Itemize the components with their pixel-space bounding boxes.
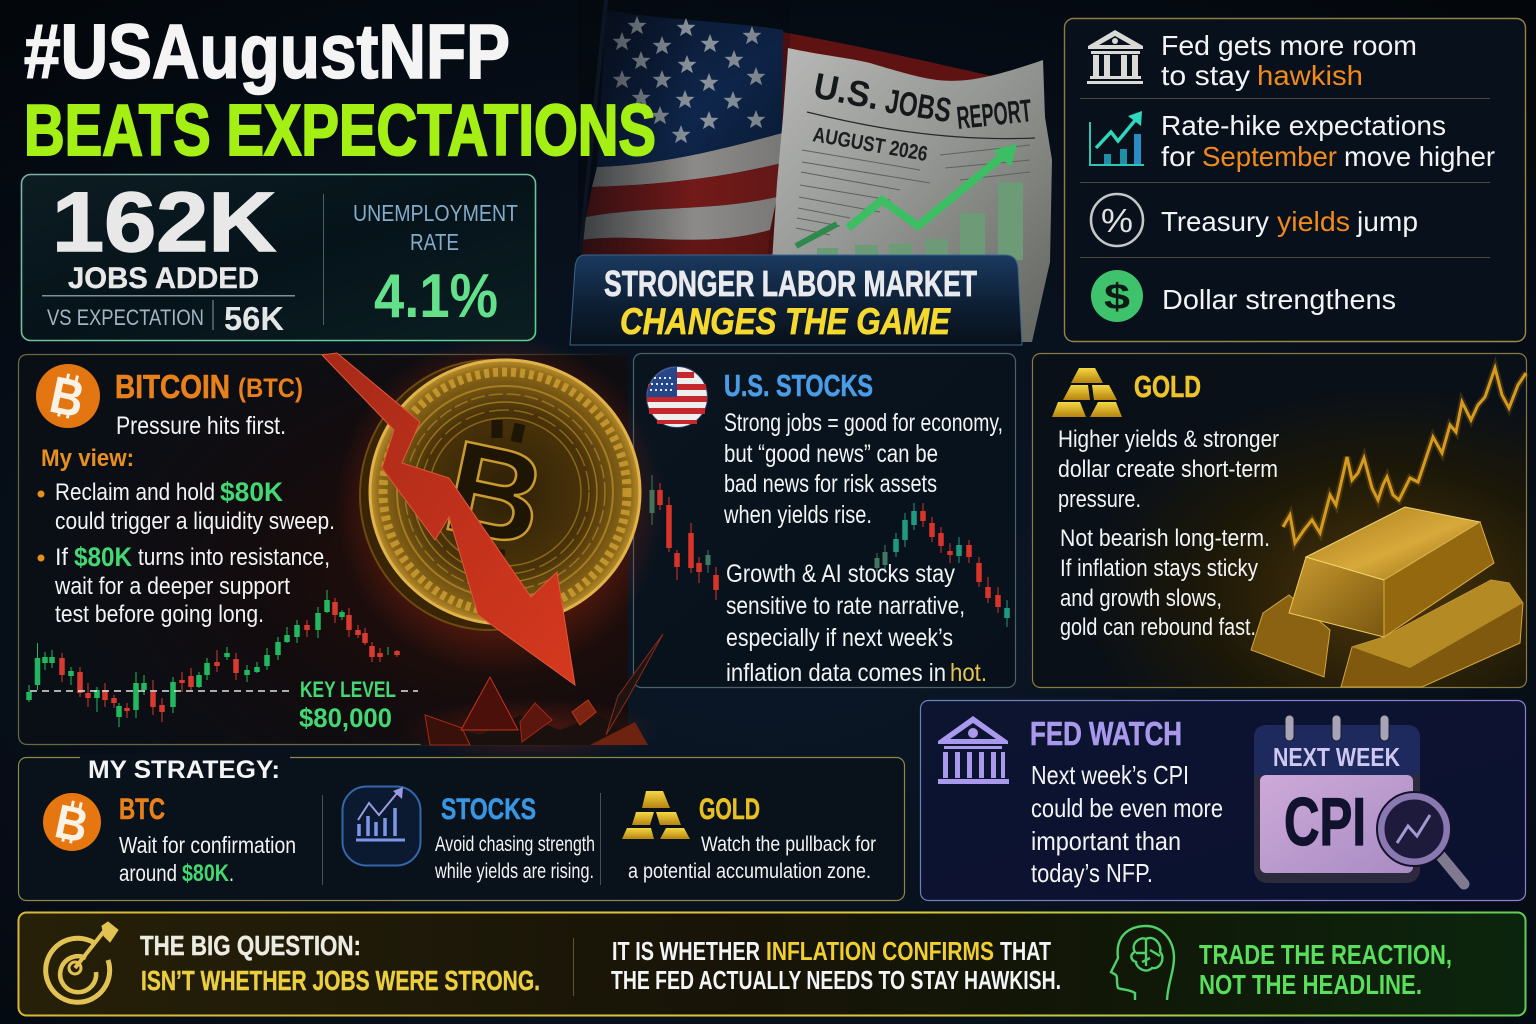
text: trade the reaction: NOT THE HEADLINE. — [1199, 969, 1422, 1000]
strategy: BTC text — [119, 793, 296, 887]
illustration: jobs report newspaper: AUGUST 2026 — [811, 123, 929, 166]
stat: unemployment rate: UNEMPLOYMENT — [353, 200, 518, 226]
panel: key jobs numbers — [22, 174, 536, 340]
text: stocks first paragraph: bad news for risk assets — [724, 470, 937, 498]
text: bullet reclaim — [38, 477, 335, 535]
illustration: jobs report newspaper: JOBS — [883, 82, 954, 130]
stat: expectation 56K: 56K — [224, 300, 284, 337]
icon: percent: % — [1101, 202, 1133, 239]
text: treasury yields: yields — [1277, 206, 1350, 237]
text: the big question: THE BIG QUESTION: — [140, 930, 361, 961]
text: stocks second paragraph: hot. — [950, 659, 987, 687]
panel: fed watch — [920, 700, 1526, 900]
panel: bitcoin — [18, 335, 665, 762]
strategy: stocks text: Avoid chasing strength — [435, 833, 595, 856]
text: gold second paragraph: gold can rebound fast. — [1060, 614, 1256, 641]
text: rate hike: move higher — [1344, 141, 1495, 172]
stat: unemployment rate — [353, 200, 518, 331]
strategy: BTC text: around — [119, 860, 177, 886]
text: rate hike — [1161, 110, 1495, 172]
text: the big question — [140, 930, 540, 996]
text: stocks first paragraph — [723, 409, 1003, 529]
text: bullet resistance: test before going long. — [55, 601, 264, 628]
text: stocks second paragraph — [726, 560, 987, 687]
text: bullet reclaim: Reclaim and hold — [55, 479, 215, 506]
icon: target with arrow — [46, 922, 118, 1002]
illustration: glow and rubble — [335, 335, 665, 762]
stat: expectation 56K: VS EXPECTATION — [47, 305, 204, 330]
text: bullet reclaim: could trigger a liquidity sweep. — [55, 508, 335, 535]
text: bullet reclaim: $80K — [220, 477, 283, 507]
icon: dollar — [1091, 270, 1143, 322]
text: bullet resistance — [38, 542, 330, 628]
text: trade the reaction — [1199, 939, 1452, 1000]
text: gold first paragraph: pressure. — [1058, 486, 1141, 513]
text: fed watch body — [1031, 760, 1223, 888]
text: trade the reaction: TRADE THE REACTION, — [1199, 939, 1452, 970]
text: bullet resistance: $80K — [74, 542, 132, 572]
key level line and label — [30, 677, 418, 733]
text: bullet resistance: wait for a deeper support — [54, 573, 290, 600]
illustration: gold bars — [1251, 507, 1523, 687]
heading: my strategy: MY STRATEGY: — [88, 756, 280, 784]
strategy: gold text: a potential accumulation zone. — [628, 860, 871, 883]
text: the big question: ISN’T WHETHER JOBS WERE STRONG. — [141, 965, 540, 996]
banner: stronger labor market: STRONGER LABOR MARKET — [604, 263, 977, 304]
illustration: jobs report newspaper: REPORT — [955, 92, 1034, 136]
band: the big question — [18, 912, 1526, 1016]
icon: bitcoin: B — [50, 795, 93, 854]
banner: stronger labor market — [570, 255, 1022, 345]
stat: unemployment rate: RATE — [410, 229, 459, 255]
illustration: bitcoin coin: B — [433, 412, 557, 574]
text: rate hike: Rate-hike expectations — [1161, 110, 1446, 141]
strategy: gold text: GOLD — [699, 793, 760, 826]
text: inflation statement: THE FED ACTUALLY NEEDS TO STAY HAWKISH. — [611, 965, 1061, 995]
text: gold second paragraph — [1060, 525, 1270, 641]
icon: rising chart — [1090, 111, 1144, 165]
illustration: American flag — [578, 0, 1000, 260]
stat: expectation 56K — [47, 300, 284, 337]
text: treasury yields — [1161, 206, 1418, 237]
text: gold second paragraph: Not bearish long-term. — [1060, 525, 1270, 552]
text: inflation statement: INFLATION CONFIRMS — [766, 936, 994, 966]
heading: U.S. stocks: U.S. STOCKS — [724, 368, 873, 403]
heading: bitcoin: BITCOIN — [115, 368, 230, 405]
strategy: BTC text: Wait for confirmation — [119, 832, 296, 858]
icon: bitcoin circle: B — [45, 366, 89, 430]
icon: dollar: $ — [1104, 276, 1130, 317]
text: gold first paragraph: dollar create short-term — [1058, 456, 1278, 483]
heading: fed watch: FED WATCH — [1030, 715, 1182, 752]
text: fed watch body: important than — [1031, 826, 1181, 856]
chart: bitcoin candlesticks — [29, 590, 397, 727]
text: fed watch body: today’s NFP. — [1031, 858, 1153, 888]
chart: stocks candlesticks — [652, 475, 1007, 627]
text: pressure hits first: Pressure hits first. — [116, 412, 286, 440]
text: stocks second paragraph: especially if next week’s — [726, 624, 953, 652]
panel: my strategy — [18, 754, 904, 900]
strategy: stocks text: STOCKS — [441, 793, 536, 826]
icon: bank — [1087, 30, 1143, 84]
icon: US flag circle — [646, 366, 708, 428]
text: gold first paragraph — [1058, 426, 1279, 513]
text: dollar strengthens: Dollar strengthens — [1162, 284, 1396, 315]
panel: gold — [1032, 354, 1526, 688]
heading: beats expectations: BEATS EXPECTATIONS — [24, 91, 656, 171]
key level line and label: $80,000 — [299, 703, 392, 733]
illustration: jobs report newspaper — [767, 48, 1052, 342]
strategy: stocks text: while yields are rising. — [434, 860, 594, 883]
chart: gold price line — [1283, 368, 1526, 543]
strategy: gold text: Watch the pullback for — [701, 833, 876, 856]
text: inflation statement: IT IS WHETHER — [612, 936, 760, 966]
icon: CPI calendar with magnifier — [1254, 715, 1464, 884]
stat: unemployment rate: 4.1% — [374, 262, 498, 331]
icon: gold ingots — [1052, 368, 1122, 417]
heading: bitcoin: (BTC) — [238, 373, 303, 403]
banner: stronger labor market: CHANGES THE GAME — [620, 301, 951, 342]
icon: head with brain — [1111, 926, 1174, 1000]
text: fed watch body: Next week’s CPI — [1031, 760, 1189, 790]
text: fed hawkish: Fed gets more room — [1161, 30, 1417, 61]
strategy: BTC text: . — [229, 860, 234, 886]
text: rate hike: for — [1161, 141, 1195, 172]
strategy: stocks text — [434, 793, 595, 883]
text: treasury yields: jump — [1356, 206, 1418, 237]
text: bullet resistance: turns into resistance, — [138, 544, 330, 571]
strategy: BTC text: BTC — [119, 793, 165, 826]
heading: gold: GOLD — [1134, 369, 1201, 404]
icon: percent — [1091, 194, 1143, 246]
title: #USAugustNFP — [24, 9, 510, 95]
key level line and label: KEY LEVEL — [300, 677, 396, 702]
arrow: falling red arrow — [322, 353, 575, 685]
panel: U.S. stocks — [634, 354, 1016, 688]
illustration: bitcoin coin — [360, 360, 640, 630]
illustration: jobs report newspaper: U.S. — [810, 65, 883, 117]
text: inflation statement: THAT — [1000, 936, 1051, 966]
text: stocks first paragraph: Strong jobs = good for economy, — [724, 409, 1003, 437]
text: stocks first paragraph: but “good news” can be — [724, 440, 938, 468]
text: fed hawkish: hawkish — [1257, 60, 1363, 91]
strategy: gold text — [628, 793, 876, 883]
panel: market consequences — [1064, 18, 1526, 342]
text: fed hawkish: to stay — [1161, 60, 1250, 91]
icon: gold ingots — [622, 791, 690, 839]
icon: stocks chart — [342, 786, 420, 866]
icon: fed building — [938, 716, 1009, 784]
text: stocks first paragraph: when yields rise. — [723, 501, 872, 529]
stat: 162K jobs added: 162K — [52, 175, 276, 269]
text: gold second paragraph: and growth slows, — [1060, 585, 1222, 612]
text: stocks second paragraph: inflation data comes in — [726, 659, 946, 687]
text: rate hike: September — [1202, 141, 1337, 172]
strategy: BTC text: $80K — [182, 860, 230, 887]
text: treasury yields: Treasury — [1161, 206, 1269, 237]
text: stocks second paragraph: sensitive to rate narrative, — [726, 592, 965, 620]
text: stocks second paragraph: Growth & AI stocks stay — [726, 560, 955, 588]
text: gold first paragraph: Higher yields & stronger — [1058, 426, 1279, 453]
icon: CPI calendar with magnifier: NEXT WEEK — [1273, 742, 1400, 772]
text: fed hawkish — [1161, 30, 1417, 91]
text: my view: My view: — [41, 445, 134, 472]
text: fed watch body: could be even more — [1031, 793, 1223, 823]
text: inflation statement — [611, 936, 1061, 995]
stat: 162K jobs added: JOBS ADDED — [68, 262, 259, 295]
text: bullet resistance: If — [55, 544, 68, 571]
icon: CPI calendar with magnifier: CPI — [1284, 784, 1366, 860]
text: gold second paragraph: If inflation stays sticky — [1060, 555, 1258, 582]
